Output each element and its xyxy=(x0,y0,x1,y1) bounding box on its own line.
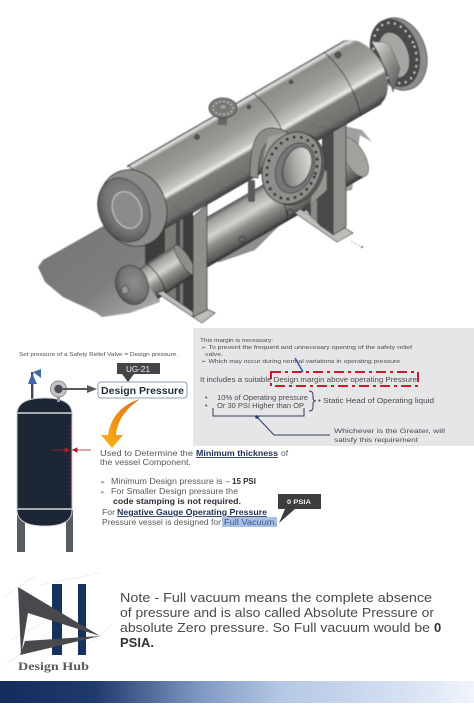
end flange neck xyxy=(372,42,400,92)
text block: minimum thickness: of xyxy=(281,448,289,458)
end flange xyxy=(361,10,436,98)
small fittings on lower vessel xyxy=(239,209,293,242)
text block: minimum thickness: the vessel Component. xyxy=(100,457,191,467)
note text: 0 xyxy=(434,620,441,635)
cast shadow xyxy=(38,125,372,317)
note text: Note - Full vacuum means the complete absence xyxy=(120,590,432,605)
design margin line: It includes a suitable Design margin above operating Pressure xyxy=(200,375,417,384)
Design Hub logo xyxy=(3,573,112,673)
vessel diagram xyxy=(17,363,187,552)
0 PSIA callout xyxy=(278,494,321,523)
pressure gauge xyxy=(50,381,66,402)
whichever note xyxy=(334,428,446,444)
set pressure caption: Set pressure of a Safety Relief Valve = Design pressure. xyxy=(19,352,178,358)
note text: absolute Zero pressure. So Full vacuum would be xyxy=(120,620,430,635)
margin options xyxy=(205,395,434,410)
margin options: • Static Head of Operating liquid xyxy=(318,398,434,405)
head shoulder xyxy=(88,159,178,257)
lower vessel small section xyxy=(110,242,199,309)
text block: minimum thickness xyxy=(100,448,289,467)
footer gradient bar xyxy=(0,681,474,703)
margin options: 10% of Operating pressure xyxy=(217,395,308,402)
margin options: • xyxy=(205,395,208,402)
necessity notes: ➢ To prevent the frequent and unnecesary opening of the safety relief xyxy=(201,345,413,351)
text block: negative gauge pressure: Negative Gauge Operating Pressure xyxy=(117,508,267,517)
rear saddle support xyxy=(295,124,353,242)
text block: minimum thickness: Used to Determine the xyxy=(100,448,193,458)
brace and bracket connector xyxy=(213,391,330,435)
text block: minimum design pressure: For Smaller Design pressure the xyxy=(111,487,238,496)
necessity notes: This margin is necessary: xyxy=(200,338,273,344)
whichever note: Whichever is the Greater, will xyxy=(334,428,446,435)
panel: design margin notes xyxy=(193,328,474,446)
front saddle support xyxy=(157,205,215,323)
front saddle web xyxy=(145,205,193,317)
saddle straps xyxy=(172,122,346,211)
text block: minimum design pressure: ➢ xyxy=(100,490,105,496)
top nozzle flange xyxy=(209,98,237,125)
design pressure label: Design Pressure xyxy=(101,386,184,397)
note text: of pressure and is also called Absolute Pressure or xyxy=(120,605,435,620)
text block: negative gauge pressure: For xyxy=(102,508,115,517)
head cap xyxy=(88,170,160,250)
necessity notes: ➢ Which may occur during normal variations in operating pressure xyxy=(201,359,400,365)
UG-21 tag: UG-21 xyxy=(126,365,151,374)
margin options: • xyxy=(205,403,208,410)
logo bars xyxy=(52,584,86,655)
large side nozzle and flange xyxy=(248,123,335,214)
small nozzles on shell xyxy=(194,52,341,140)
note text xyxy=(120,590,441,650)
arrow to design pressure xyxy=(62,385,97,393)
legs xyxy=(17,510,73,552)
logo swoosh xyxy=(18,587,100,655)
illustration: horizontal pressure vessel on saddles xyxy=(38,10,436,323)
whichever note: satisfy this requirement xyxy=(334,437,418,444)
necessity notes: valve. xyxy=(205,352,223,358)
relief valve xyxy=(28,369,41,402)
logo wordmark: Design Hub xyxy=(18,659,89,673)
text block: minimum thickness: Minimum thickness xyxy=(196,448,278,458)
red dashed highlight with leader xyxy=(271,358,418,386)
text block: negative gauge pressure: Full Vacuum. xyxy=(224,518,277,527)
text block: negative gauge pressure: Pressure vessel is designed for xyxy=(102,518,221,527)
vessel body xyxy=(17,398,72,526)
0 PSIA callout: 0 PSIA xyxy=(287,499,311,506)
main vessel shell xyxy=(88,30,399,257)
text block: minimum design pressure: code stamping is not required. xyxy=(113,497,241,506)
stray bolt xyxy=(351,241,363,248)
text block: minimum design pressure: Minimum Design pressure is – xyxy=(111,477,230,486)
curved orange arrow xyxy=(101,399,140,448)
text block: minimum design pressure xyxy=(100,477,256,506)
design pressure label xyxy=(98,382,187,398)
margin options: Or 30 PSI Higher than OP xyxy=(217,403,304,410)
lower vessel large section xyxy=(179,133,374,271)
note text: PSIA. xyxy=(120,635,154,650)
UG-21 tag xyxy=(117,363,160,382)
text block: minimum design pressure: ➢ xyxy=(100,480,105,486)
text block: minimum design pressure: 15 PSI xyxy=(232,477,256,486)
necessity notes xyxy=(200,338,413,365)
wall thickness marker xyxy=(52,425,91,500)
text block: negative gauge pressure xyxy=(102,508,277,527)
